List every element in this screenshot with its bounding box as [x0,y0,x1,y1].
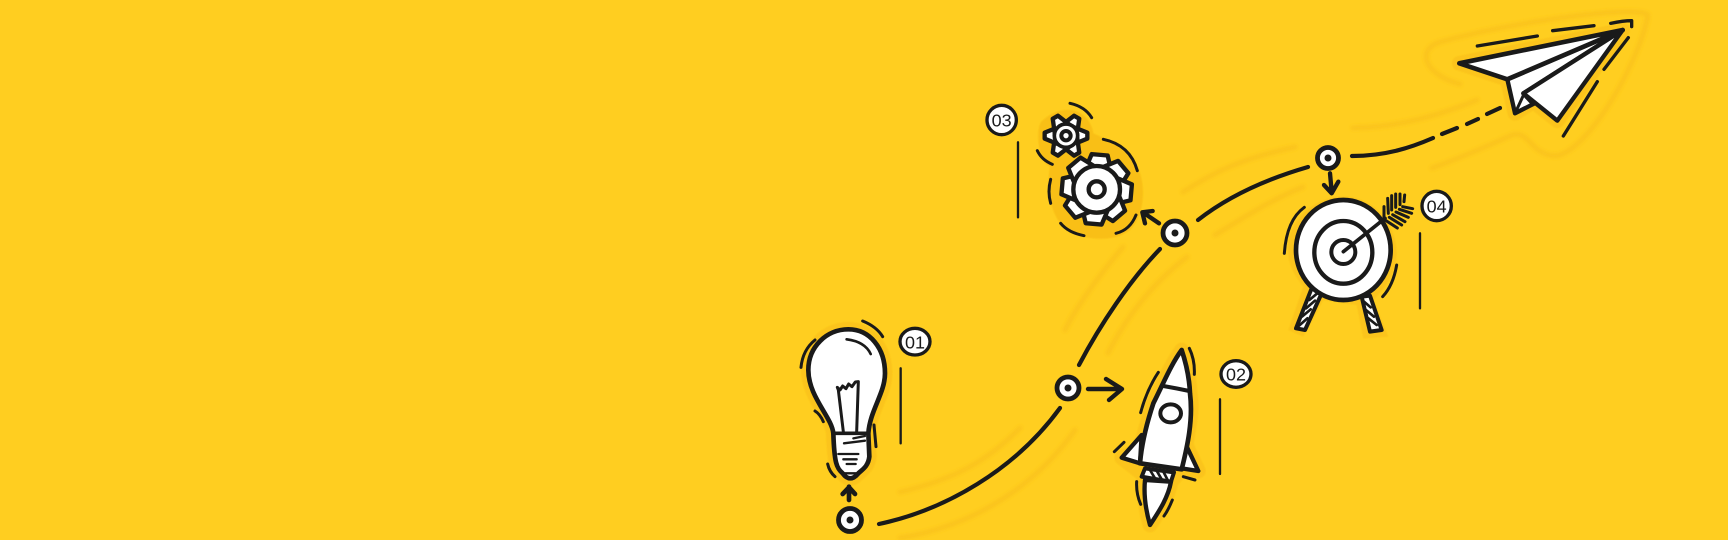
arrow to gears [1142,211,1159,223]
arrow to target [1324,173,1338,193]
target legs [1296,288,1382,332]
bulb glass and base [808,329,885,478]
rocket speed marks [1114,348,1195,516]
step 4: target [1284,173,1451,338]
dart [1343,194,1413,252]
plane fold [1515,94,1524,113]
step 1: light bulb [801,321,930,500]
bulb details [801,321,883,477]
step 3: gears [987,103,1159,239]
arrow to bulb [843,487,855,500]
small gear [1045,113,1087,158]
plane underside [1507,30,1623,113]
vertical rule 02 [1216,399,1223,474]
path line with dashes [879,108,1500,524]
badge 03 [987,105,1016,135]
badge 02: 02 [1226,365,1246,385]
vertical rule 04 [1416,233,1423,308]
badge 01: 01 [905,332,925,352]
target rings [1296,200,1391,300]
fins [1122,435,1198,471]
nozzle [1142,468,1174,482]
motion trails [900,12,1648,538]
plane left wing [1459,30,1623,79]
vertical rule 03 [1014,142,1021,217]
arrow to rocket [1088,379,1122,400]
flame [1145,480,1171,525]
rocket nose line and window [1160,386,1189,422]
badge 01 [900,328,930,355]
badge 04 [1422,191,1451,221]
large gear [1061,154,1132,225]
badge 03: 03 [992,111,1012,131]
badge 04: 04 [1427,197,1447,217]
step 2: rocket [1114,348,1251,525]
target motion arcs [1284,207,1397,297]
paper plane [1459,21,1632,136]
gear motion arcs [1037,103,1137,236]
plane speed marks [1477,21,1632,136]
badge 02 [1221,361,1251,387]
rocket body [1140,350,1191,469]
vertical rule 01 [897,368,904,443]
plane right wing [1523,30,1623,121]
waypoint nodes [838,148,1338,532]
